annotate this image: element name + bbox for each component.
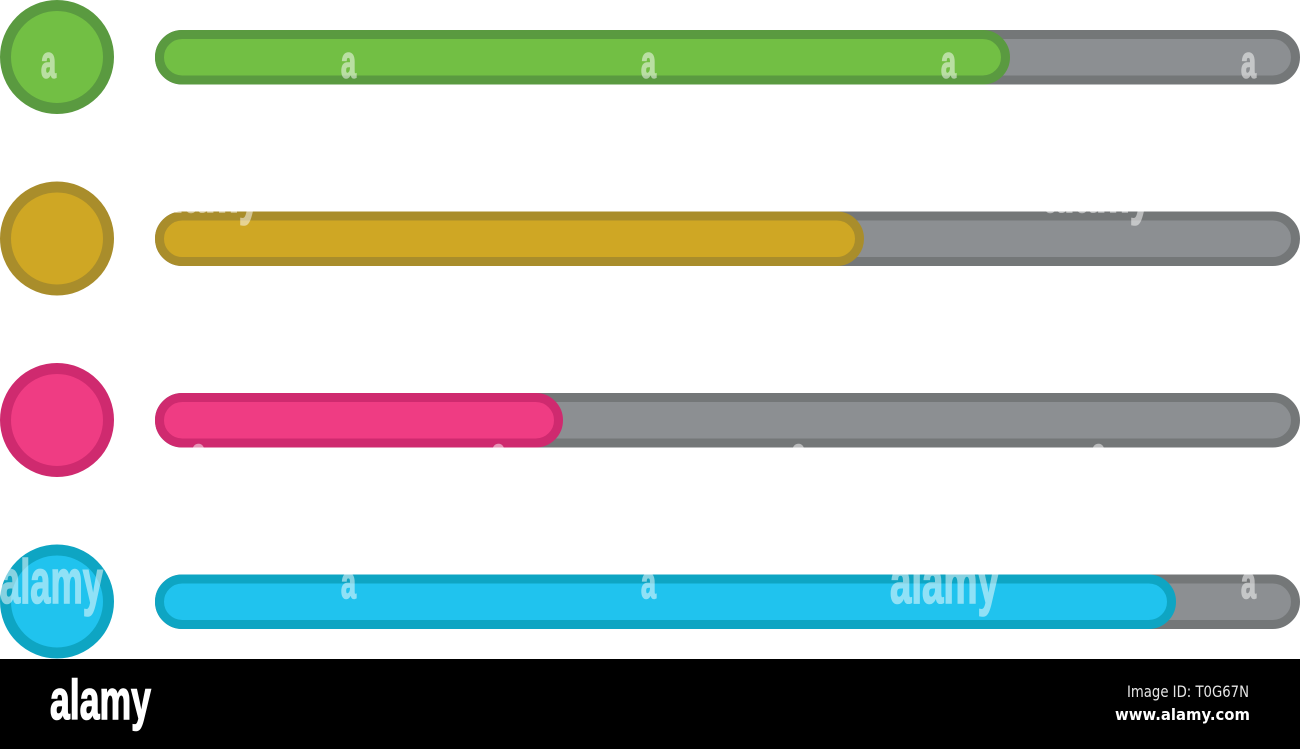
watermark overlay: a bbox=[791, 428, 807, 479]
row 2: gold indicator bbox=[6, 187, 1296, 290]
watermark overlay: a bbox=[1241, 557, 1257, 608]
track: green row grey bar bbox=[160, 34, 1296, 80]
watermark overlay bbox=[0, 36, 1257, 617]
watermark overlay: a bbox=[941, 36, 957, 88]
watermark overlay: a bbox=[491, 428, 507, 479]
watermark overlay: alamy bbox=[1043, 157, 1151, 226]
watermark overlay: alamy bbox=[890, 548, 999, 617]
watermark overlay: a bbox=[641, 557, 657, 608]
fill: pink progress bar bbox=[160, 398, 558, 443]
watermark overlay: a bbox=[341, 557, 357, 608]
icon: pink circle bbox=[6, 368, 108, 472]
watermark overlay: a bbox=[1091, 428, 1107, 479]
icon: gold circle bbox=[6, 187, 108, 290]
footer url: www.alamy.com bbox=[1115, 705, 1250, 724]
watermark overlay: a bbox=[191, 428, 207, 479]
fill: blue progress bar bbox=[160, 579, 1172, 624]
track: pink row grey bar bbox=[160, 398, 1296, 443]
fill: gold progress bar bbox=[160, 216, 860, 262]
footer logo: alamy: alamy bbox=[50, 668, 151, 731]
footer image id: Image ID: T0G67N bbox=[1127, 682, 1249, 701]
watermark overlay: a bbox=[341, 36, 357, 88]
watermark overlay: a bbox=[1241, 36, 1257, 88]
watermark overlay: a bbox=[641, 36, 657, 88]
row 4: blue indicator bbox=[6, 550, 1296, 653]
icon: blue circle bbox=[6, 550, 108, 653]
row 3: pink indicator bbox=[6, 368, 1296, 472]
watermark overlay: a bbox=[41, 36, 57, 88]
icon: green circle bbox=[6, 6, 108, 108]
watermark overlay: alamy bbox=[152, 157, 260, 226]
track: blue row grey bar bbox=[160, 579, 1296, 624]
footer band bbox=[0, 659, 1300, 749]
track: gold row grey bar bbox=[160, 216, 1296, 262]
fill: green progress bar bbox=[160, 34, 1006, 80]
row 1: green indicator bbox=[6, 6, 1296, 108]
watermark overlay: alamy bbox=[0, 548, 103, 617]
